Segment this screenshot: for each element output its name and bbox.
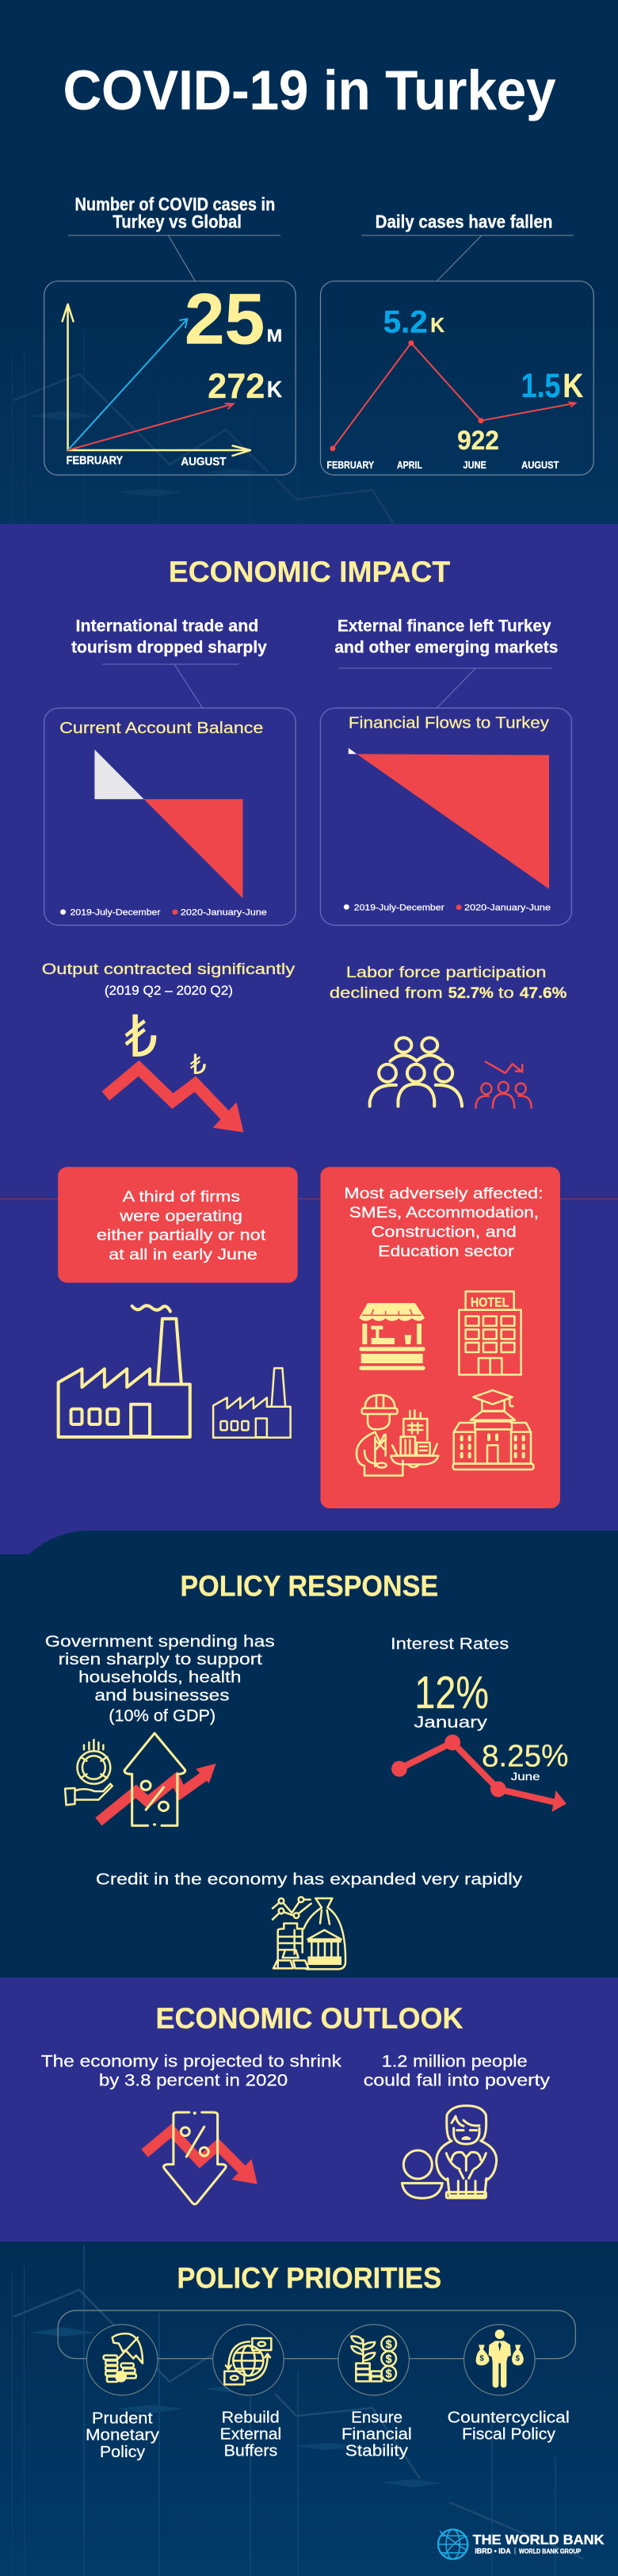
text: interest rates: Interest Rates <box>391 1634 509 1653</box>
triangle: 2020 <box>357 754 549 889</box>
heading: policy priorities: POLICY PRIORITIES <box>177 2262 441 2295</box>
icon: man with money bags: $ <box>516 2354 520 2363</box>
callout: a third of firms: were operating <box>119 1207 242 1225</box>
text: economy projected: The economy is projected to shrink <box>41 2051 341 2070</box>
text: government spending: households, health <box>78 1668 241 1686</box>
axis label: February: FEBRUARY <box>67 454 123 467</box>
month labels: FEBRUARY <box>326 460 374 471</box>
heading: economic outlook: ECONOMIC OUTLOOK <box>156 2002 464 2035</box>
value: 272K: K <box>267 376 282 402</box>
priority icons, left <box>104 2333 271 2384</box>
value: 1.5K: K <box>563 367 583 405</box>
chart: interest rate arrow <box>391 1734 566 1812</box>
text: labor force: to <box>498 984 514 1002</box>
heading: daily cases: Daily cases have fallen <box>376 212 552 232</box>
label: prudent monetary policy: Policy <box>100 2442 146 2461</box>
text: economy projected: by 3.8 percent in 2020 <box>99 2070 288 2089</box>
Turkey trend arrow <box>68 403 234 450</box>
value: 25M: M <box>267 326 282 346</box>
icon: people <box>370 1038 462 1106</box>
callout: a third of firms: A third of firms <box>123 1188 240 1206</box>
label: ensure financial stability <box>341 2408 412 2459</box>
sub wordmark: IBRD • IDA <box>475 2547 511 2555</box>
axes <box>63 304 250 456</box>
text: government spending <box>45 1631 275 1725</box>
chart title: Financial Flows to Turkey <box>349 714 549 732</box>
label: prudent monetary policy: Monetary <box>86 2425 160 2444</box>
chart title: Current Account Balance <box>59 720 263 737</box>
icon ring: stability <box>338 2325 409 2395</box>
label: ensure financial stability: Stability <box>345 2441 409 2459</box>
section: policy response <box>45 1569 568 1888</box>
legend <box>344 903 551 912</box>
icon: shrinking workforce <box>475 1062 532 1107</box>
icon ring: buffers <box>213 2325 284 2395</box>
legend: 2020-January-June <box>464 903 551 912</box>
text: poverty: could fall into poverty <box>364 2070 550 2089</box>
value: 25M: 25 <box>185 278 265 359</box>
icon ring: fiscal <box>464 2325 535 2395</box>
month labels <box>326 460 559 471</box>
panel: most adversely affected: SMEs, Accommodation, <box>349 1204 539 1221</box>
icon: lira with falling arrow: ₺ <box>124 1005 158 1069</box>
value: 12% January <box>414 1668 489 1731</box>
global trend arrow <box>68 319 187 450</box>
icon: person in poverty <box>402 2106 497 2198</box>
subheading: finance <box>334 616 558 656</box>
value: 5.2K: 5.2 <box>383 304 428 340</box>
panel: financial flows <box>320 708 571 925</box>
icon: man with money bags: $ <box>479 2354 484 2363</box>
section: economic impact charts <box>44 556 571 925</box>
text: government spending: and businesses <box>94 1685 230 1704</box>
label: countercyclical fiscal policy: Fiscal Policy <box>462 2425 556 2443</box>
label: ensure financial stability: Financial <box>341 2425 412 2443</box>
icon: lira with falling arrow: ₺ <box>190 1049 207 1080</box>
label: countercyclical fiscal policy <box>448 2408 570 2443</box>
panel: cases line chart <box>44 278 296 475</box>
icon: large factory <box>59 1305 190 1437</box>
panel: daily cases line chart <box>320 281 593 475</box>
icon ring: monetary <box>86 2325 158 2395</box>
sector icons <box>357 1291 533 1476</box>
value: 12% January: 12% <box>414 1668 489 1718</box>
value: 8.25% June: 8.25% <box>482 1739 568 1773</box>
triangle: 2020 <box>144 799 242 898</box>
text: labor force: declined from <box>330 984 443 1002</box>
icon: globe <box>438 2529 467 2559</box>
text: labor force <box>330 964 566 1002</box>
heading: policy response: POLICY RESPONSE <box>180 1569 438 1602</box>
label: prudent monetary policy <box>86 2408 160 2461</box>
callout: a third of firms: either partially or not <box>97 1226 266 1244</box>
callout: a third of firms <box>58 1167 298 1282</box>
panel: most adversely affected: Construction, and <box>372 1223 517 1240</box>
section: header <box>44 60 593 475</box>
text: credit: Credit in the economy has expanded very rapidly <box>96 1869 523 1888</box>
label: countercyclical fiscal policy: Countercyclical <box>448 2408 570 2426</box>
sub wordmark <box>475 2547 582 2555</box>
icon: hotel <box>459 1291 521 1374</box>
heading: cases vs global: Number of COVID cases in <box>75 194 275 215</box>
value: 272K: 272 <box>208 367 265 406</box>
panel: most adversely affected: Most adversely affected: <box>344 1185 544 1202</box>
icon: small factory <box>213 1368 291 1438</box>
value: 12% January: January <box>414 1712 488 1731</box>
panel: current account balance <box>44 708 296 925</box>
text: government spending: Government spending has <box>45 1631 275 1650</box>
icon: plant and coins: $ <box>386 2368 392 2381</box>
label: rebuild external buffers: Rebuild <box>222 2408 280 2426</box>
text: economy projected <box>41 2051 341 2089</box>
icon: market stall <box>359 1303 425 1370</box>
value: 922: 922 <box>457 425 499 456</box>
text: government spending: risen sharply to support <box>59 1649 263 1668</box>
icon: coin, hand, up arrow <box>65 1733 216 1826</box>
month labels: APRIL <box>397 460 422 471</box>
text: government spending: (10% of GDP) <box>109 1706 216 1725</box>
text: labor force: 52.7% <box>448 984 494 1002</box>
legend: 2020-January-June <box>181 908 267 917</box>
callout: a third of firms: at all in early June <box>109 1246 258 1263</box>
label: ensure financial stability: Ensure <box>351 2408 402 2426</box>
value: 8.25% June <box>482 1739 568 1783</box>
subheading: trade: International trade and <box>76 616 258 635</box>
icon: plant and coins <box>351 2337 396 2381</box>
text: poverty: 1.2 million people <box>382 2051 528 2070</box>
legend: 2019-July-December <box>354 903 444 912</box>
text: output contracted <box>42 961 296 998</box>
label: rebuild external buffers: Buffers <box>224 2441 277 2459</box>
navy policy response background <box>0 1531 618 1978</box>
text: output contracted: Output contracted significantly <box>42 961 296 978</box>
icon: plant and coins: $ <box>386 2353 392 2366</box>
icon: plant and coins: $ <box>386 2338 392 2351</box>
month labels: AUGUST <box>521 460 559 471</box>
triangle: 2019 <box>94 750 144 799</box>
red line <box>330 340 575 451</box>
value: 1.5K: 1.5 <box>521 367 560 405</box>
connector frame <box>58 2310 575 2359</box>
subheading: trade: tourism dropped sharply <box>71 637 267 656</box>
priority icons, right <box>351 2329 524 2387</box>
value: 8.25% June: June <box>511 1770 540 1783</box>
heading: cases vs global: Turkey vs Global <box>113 212 242 232</box>
sub wordmark: WORLD BANK GROUP <box>519 2548 582 2555</box>
text: labor force: 47.6% <box>520 984 566 1002</box>
icon: percent down arrow <box>145 2112 258 2204</box>
legend: 2019-July-December <box>71 908 161 917</box>
icon: construction worker <box>357 1395 438 1476</box>
icon: man with money bags <box>476 2329 524 2387</box>
label: rebuild external buffers: External <box>220 2425 281 2443</box>
month labels: JUNE <box>464 460 486 471</box>
panel: most adversely affected: Education sector <box>378 1243 514 1260</box>
heading: economic impact: ECONOMIC IMPACT <box>169 556 450 588</box>
value: 5.2K: K <box>430 314 444 336</box>
panel: most adversely affected <box>320 1167 560 1508</box>
wordmark: THE WORLD BANK <box>473 2532 605 2547</box>
icon: umbrella and coins <box>104 2333 143 2383</box>
logo: the world bank <box>438 2529 605 2559</box>
icon: hotel: HOTEL <box>471 1294 509 1309</box>
subheading: trade <box>71 616 267 656</box>
triangle: 2019 <box>349 748 357 754</box>
section: economic outlook <box>41 2002 550 2204</box>
text: labor force: Labor force participation <box>346 964 547 981</box>
section: policy priorities <box>58 2262 575 2461</box>
icon: university <box>453 1390 533 1470</box>
label: prudent monetary policy: Prudent <box>92 2408 153 2427</box>
axis label: August: AUGUST <box>181 456 227 468</box>
section: output, labor, firms <box>42 961 566 1508</box>
heading: cases vs global <box>75 194 275 232</box>
legend <box>60 908 267 917</box>
icon: globe and banknotes <box>224 2338 271 2384</box>
text: output contracted: (2019 Q2 – 2020 Q2) <box>105 983 233 998</box>
icon: lira with falling arrow <box>105 1005 243 1133</box>
icon: credit bag, bank, gold <box>273 1897 345 1969</box>
label: rebuild external buffers <box>220 2408 281 2459</box>
text: poverty <box>364 2051 550 2089</box>
